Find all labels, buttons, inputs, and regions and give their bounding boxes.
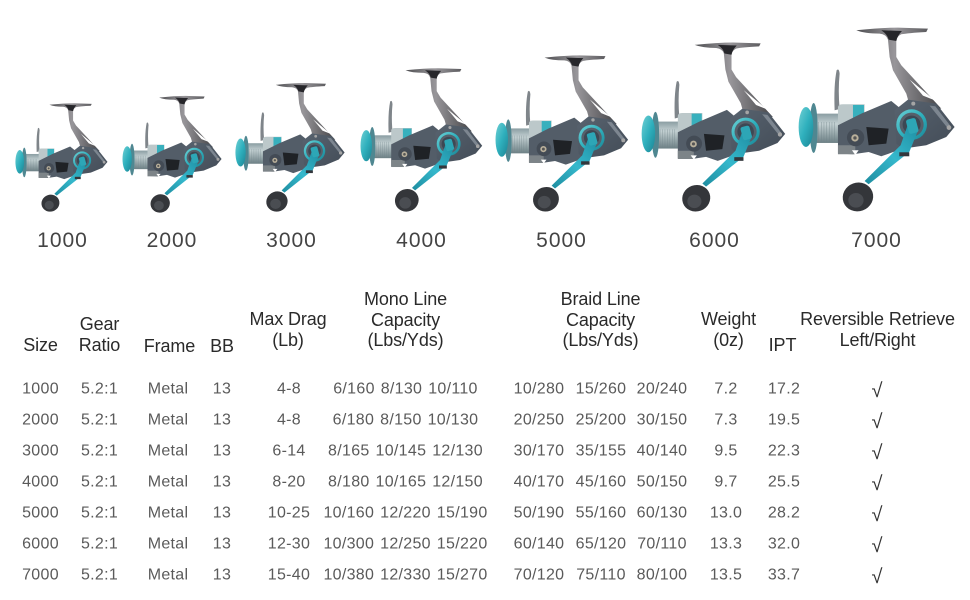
size labels: 7000	[851, 229, 902, 252]
row 2000: 4-8	[277, 412, 301, 428]
row 5000: √	[872, 504, 883, 526]
row 2000: Metal	[148, 412, 188, 428]
row 3000: 9.5	[714, 442, 738, 460]
row 3000: Metal	[148, 442, 188, 460]
size labels: 6000	[689, 229, 740, 252]
reel 7000	[799, 28, 955, 216]
row 5000: 13	[213, 504, 231, 522]
row 2000: 25/200	[576, 412, 626, 428]
row 1000: 1000	[22, 380, 59, 398]
row 6000: Metal	[148, 536, 188, 552]
reel 3000	[235, 83, 345, 215]
table header: Mono Line	[364, 289, 447, 309]
row 5000: 5.2:1	[81, 504, 118, 522]
row 3000: 22.3	[768, 442, 800, 460]
row 6000: 13.3	[710, 536, 742, 552]
size labels: 4000	[396, 229, 447, 252]
size labels: 3000	[266, 229, 317, 252]
row 3000: 5.2:1	[81, 442, 118, 460]
row 6000: 60/140	[514, 536, 564, 552]
table header: IPT	[769, 335, 796, 355]
row 6000: 65/120	[576, 536, 626, 552]
row 6000: 6000	[22, 536, 59, 552]
row 2000: 30/150	[637, 412, 687, 428]
row 1000: √	[872, 380, 883, 402]
reel 1000	[15, 103, 107, 214]
row 4000: Metal	[148, 474, 188, 490]
row 6000	[22, 535, 883, 557]
row 5000: 60/130	[637, 504, 687, 522]
table header: Size	[23, 335, 58, 355]
row 6000: 10/300 12/250 15/220	[323, 536, 488, 552]
row 5000: 28.2	[768, 504, 800, 522]
reel lineup	[15, 28, 955, 216]
row 5000: 13.0	[710, 504, 742, 522]
row 1000: 6/160 8/130 10/110	[333, 380, 478, 398]
row 1000: 15/260	[576, 380, 626, 398]
row 3000: √	[872, 442, 883, 464]
row 5000: 10-25	[268, 504, 310, 522]
row 4000: 25.5	[768, 474, 800, 490]
table header: Capacity	[566, 310, 635, 330]
row 4000: √	[872, 473, 883, 495]
table header: Braid Line	[561, 289, 641, 309]
row 7000: 13	[213, 566, 231, 584]
table header: Gear	[80, 314, 119, 334]
row 1000: 7.2	[714, 380, 738, 398]
row 2000: 19.5	[768, 412, 800, 428]
row 7000: 80/100	[637, 566, 687, 584]
reel 6000	[642, 42, 785, 215]
row 5000: 50/190	[514, 504, 564, 522]
row 3000: 30/170	[514, 442, 564, 460]
table header: Reversible Retrieve	[800, 309, 955, 329]
row 2000: 13	[213, 412, 231, 428]
size labels: 2000	[147, 229, 197, 252]
row 7000: 15-40	[268, 566, 310, 584]
table header	[23, 289, 955, 356]
row 7000: 70/120	[514, 566, 564, 584]
row 6000: 5.2:1	[81, 536, 118, 552]
row 4000: 8-20	[272, 474, 306, 490]
row 1000: 5.2:1	[81, 380, 118, 398]
row 3000: 6-14	[272, 442, 306, 460]
row 1000: 4-8	[277, 380, 301, 398]
row 6000: 32.0	[768, 536, 800, 552]
row 4000: 8/180 10/165 12/150	[328, 474, 483, 490]
row 1000: 10/280	[514, 380, 564, 398]
row 1000: Metal	[148, 380, 188, 398]
size labels: 1000	[37, 229, 88, 252]
row 7000	[22, 566, 883, 588]
row 7000: √	[872, 566, 883, 588]
row 2000: 6/180 8/150 10/130	[333, 412, 478, 428]
row 7000: 7000	[22, 566, 59, 584]
row 1000: 17.2	[768, 380, 800, 398]
row 6000: √	[872, 535, 883, 557]
row 4000: 50/150	[637, 474, 687, 490]
row 3000: 13	[213, 442, 231, 460]
row 4000: 40/170	[514, 474, 564, 490]
table header: Frame	[144, 336, 195, 356]
row 6000: 13	[213, 536, 231, 552]
table rows	[22, 380, 883, 588]
table header: Max Drag	[249, 309, 327, 329]
row 5000: 5000	[22, 504, 59, 522]
row 3000: 8/165 10/145 12/130	[328, 442, 483, 460]
row 7000: 13.5	[710, 566, 742, 584]
row 7000: Metal	[148, 566, 188, 584]
row 4000: 9.7	[714, 474, 738, 490]
row 2000: 7.3	[714, 412, 738, 428]
size labels: 5000	[536, 229, 587, 252]
reel 5000	[496, 55, 628, 215]
row 5000: 10/160 12/220 15/190	[323, 504, 488, 522]
table header: Ratio	[79, 335, 120, 355]
row 2000: √	[872, 411, 883, 433]
row 2000	[22, 411, 883, 433]
table header: (Lb)	[272, 330, 304, 350]
reel 4000	[361, 68, 482, 215]
row 1000: 13	[213, 380, 231, 398]
row 2000: 2000	[22, 412, 59, 428]
row 3000	[22, 442, 883, 464]
table header: (Lbs/Yds)	[368, 330, 443, 350]
row 7000: 75/110	[576, 566, 626, 584]
row 2000: 5.2:1	[81, 412, 118, 428]
row 7000: 10/380 12/330 15/270	[323, 566, 488, 584]
row 2000: 20/250	[514, 412, 564, 428]
size labels	[37, 229, 902, 252]
row 4000: 4000	[22, 474, 59, 490]
row 3000: 40/140	[637, 442, 687, 460]
row 6000: 12-30	[268, 536, 310, 552]
row 6000: 70/110	[637, 536, 687, 552]
row 5000: 55/160	[576, 504, 626, 522]
row 3000: 3000	[22, 442, 59, 460]
row 7000: 33.7	[768, 566, 800, 584]
row 5000	[22, 504, 883, 526]
table header: BB	[210, 336, 234, 356]
row 5000: Metal	[148, 504, 188, 522]
row 1000: 20/240	[637, 380, 687, 398]
row 4000: 13	[213, 474, 231, 490]
row 3000: 35/155	[576, 442, 626, 460]
table header: Capacity	[371, 310, 440, 330]
row 1000	[22, 380, 883, 402]
table header: (0z)	[713, 330, 744, 350]
table header: Weight	[701, 309, 756, 329]
reel 2000	[123, 96, 222, 215]
table header: Left/Right	[840, 330, 916, 350]
row 4000: 45/160	[576, 474, 626, 490]
table header: (Lbs/Yds)	[563, 330, 638, 350]
row 7000: 5.2:1	[81, 566, 118, 584]
row 4000: 5.2:1	[81, 474, 118, 490]
row 4000	[22, 473, 883, 495]
